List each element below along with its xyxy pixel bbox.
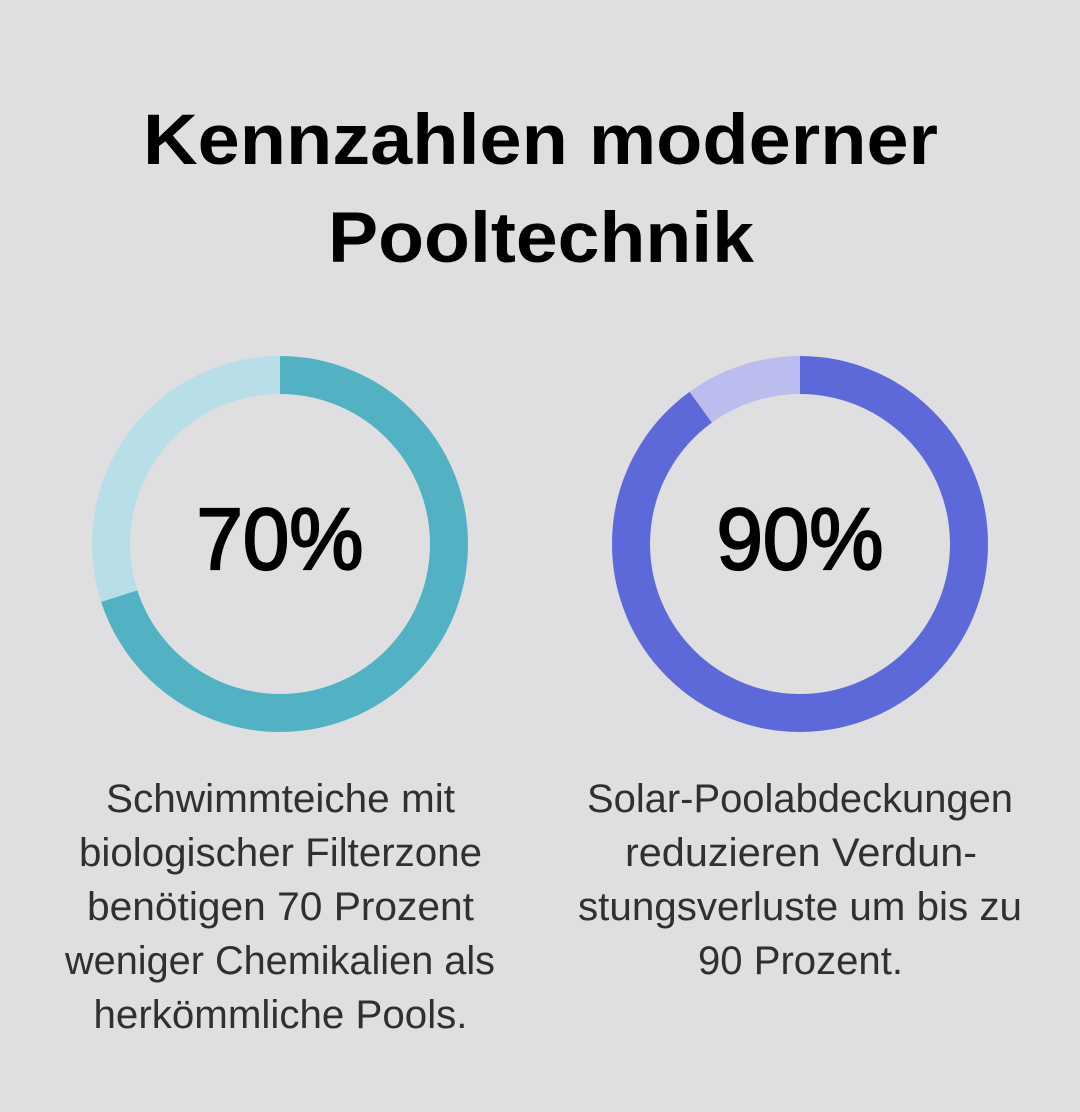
description: swimming ponds: benötigen 70 Prozent xyxy=(87,885,474,929)
panel: swimming ponds 70 percent xyxy=(64,375,495,1037)
donut chart: 90% xyxy=(631,375,969,713)
description: swimming ponds: herkömmliche Pools. xyxy=(94,993,468,1037)
description: swimming ponds: biologischer Filterzone xyxy=(79,831,482,875)
description: solar pool covers: reduzieren Verdun- xyxy=(625,831,977,875)
title: Kennzahlen moderner xyxy=(143,101,938,180)
description: solar pool covers: Solar-Poolabdeckungen xyxy=(587,777,1013,821)
description: solar pool covers: 90 Prozent. xyxy=(698,939,903,983)
title: Pooltechnik xyxy=(328,199,755,278)
title xyxy=(143,101,938,278)
description: swimming ponds: weniger Chemikalien als xyxy=(64,939,495,983)
stat: 70%: 70% xyxy=(196,491,364,588)
stat: 90%: 90% xyxy=(716,491,884,588)
description: swimming ponds: Schwimmteiche mit xyxy=(106,777,455,821)
panel: solar pool covers 90 percent xyxy=(578,375,1022,983)
description: solar pool covers xyxy=(578,777,1022,983)
donut chart: 70% xyxy=(111,375,449,713)
description: swimming ponds xyxy=(64,777,495,1037)
description: solar pool covers: stungsverluste um bis zu xyxy=(578,885,1022,929)
